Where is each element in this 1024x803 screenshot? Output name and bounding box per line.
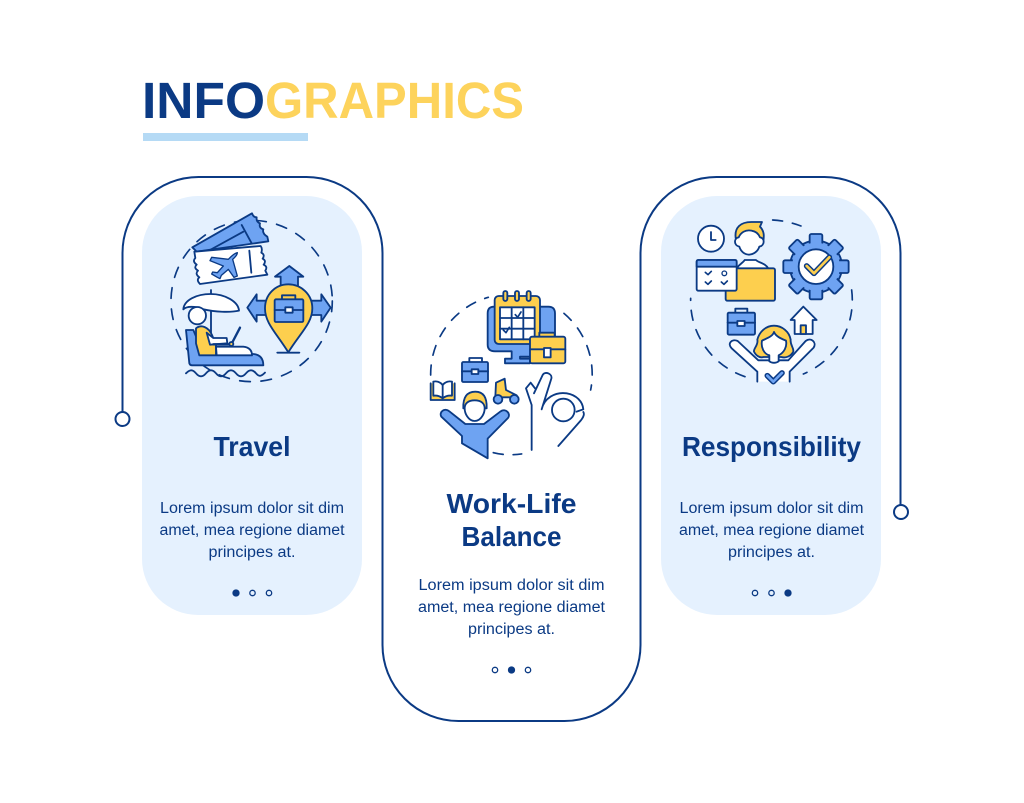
dashed circle: [431, 297, 592, 455]
small briefcase: [469, 358, 482, 362]
icon: responsibility: [691, 220, 852, 382]
back ticket: [192, 213, 268, 252]
text block: travel: [160, 500, 345, 561]
parasol pole: [208, 290, 214, 345]
roller skate: [495, 379, 517, 397]
woman hair: [754, 326, 793, 357]
pagination dots: travel: [233, 590, 272, 596]
icon: work-life balance: [431, 291, 592, 458]
dashed circle: [691, 220, 852, 377]
briefcase: [282, 295, 295, 299]
parasol: [183, 294, 239, 312]
waves: [186, 370, 265, 376]
laptop back: [726, 268, 775, 301]
text block: travel: Lorem ipsum dolor sit dim: [160, 500, 344, 517]
heading: work-life balance: Balance: [462, 521, 562, 552]
clock: [698, 226, 724, 252]
checklist: [697, 260, 737, 291]
pagination dots: responsibility: [752, 590, 791, 596]
text block: travel: amet, mea regione diamet: [160, 522, 345, 539]
large briefcase: [539, 333, 555, 337]
text block: responsibility: Lorem ipsum dolor sit dim: [680, 500, 864, 517]
icon: travel: [171, 213, 332, 382]
dashed circle: [171, 220, 332, 382]
title: GRAPHICS: [265, 72, 524, 129]
person face: [465, 400, 485, 421]
person hair: [463, 392, 487, 408]
heading: responsibility: Responsibility: [682, 431, 861, 462]
monitor: [488, 307, 555, 363]
heading: travel: Travel: [214, 431, 290, 462]
heading: work-life balance: Work-Life: [446, 488, 576, 519]
small briefcase: [735, 309, 747, 313]
woman face: [762, 332, 786, 363]
check: [767, 373, 782, 382]
title: INFO: [142, 72, 265, 129]
heading: work-life balance: [446, 488, 576, 552]
person body: [441, 410, 509, 458]
book: [431, 383, 455, 400]
front ticket: [194, 246, 267, 284]
text block: work-life balance: principes at.: [468, 621, 555, 638]
laptop: [213, 328, 240, 344]
man hair: [735, 222, 764, 242]
text block: responsibility: amet, mea regione diamet: [679, 522, 865, 539]
pagination dots: work-life balance: [492, 667, 531, 673]
right arrow: [307, 294, 331, 322]
text block: work-life balance: amet, mea regione diamet: [418, 599, 606, 616]
text block: work-life balance: Lorem ipsum dolor sit dim: [418, 577, 604, 594]
woman arms: [730, 340, 815, 382]
connecting outline frame: [116, 177, 908, 721]
airplane: [210, 253, 237, 279]
man shoulders: [737, 260, 769, 279]
text block: responsibility: [679, 500, 865, 561]
panel: travel background: [142, 196, 362, 615]
lounger: [186, 330, 263, 365]
gear: [783, 234, 849, 299]
left arrow: [247, 294, 272, 322]
OK hand: [526, 373, 584, 450]
title: [142, 72, 524, 129]
man face: [735, 230, 764, 255]
calendar: [495, 296, 540, 344]
text block: travel: principes at.: [208, 544, 296, 561]
house: [791, 307, 817, 334]
person body: [196, 326, 216, 355]
text block: work-life balance: [418, 577, 606, 638]
person head: [189, 307, 206, 324]
panel: responsibility background: [661, 196, 881, 615]
title underline: [143, 133, 308, 141]
text block: responsibility: principes at.: [728, 544, 815, 561]
up arrow: [275, 266, 303, 287]
map pin: [265, 284, 312, 352]
